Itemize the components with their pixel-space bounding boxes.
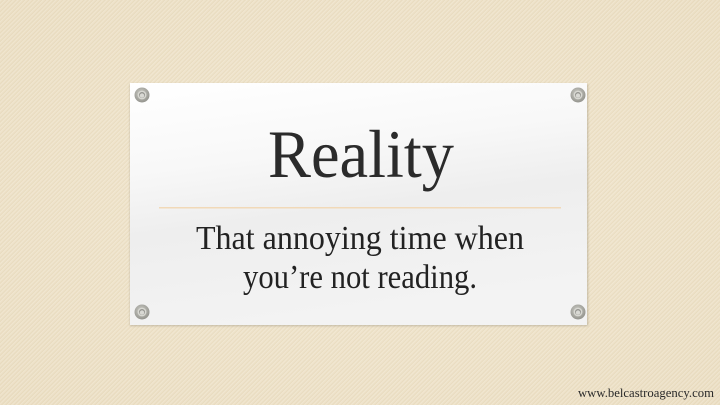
- subtitle line two: you’re not reading.: [243, 259, 477, 296]
- title: Reality: [268, 116, 454, 192]
- icon: grommet top right: [570, 88, 586, 102]
- subtitle line one: That annoying time when: [196, 220, 524, 257]
- website credit: www.belcastroagency.com: [578, 386, 714, 400]
- panel: sign plate: [130, 83, 588, 326]
- icon: grommet bottom right: [570, 304, 586, 320]
- divider line: [159, 207, 561, 208]
- icon: grommet bottom left: [134, 304, 150, 320]
- icon: grommet top left: [134, 88, 150, 102]
